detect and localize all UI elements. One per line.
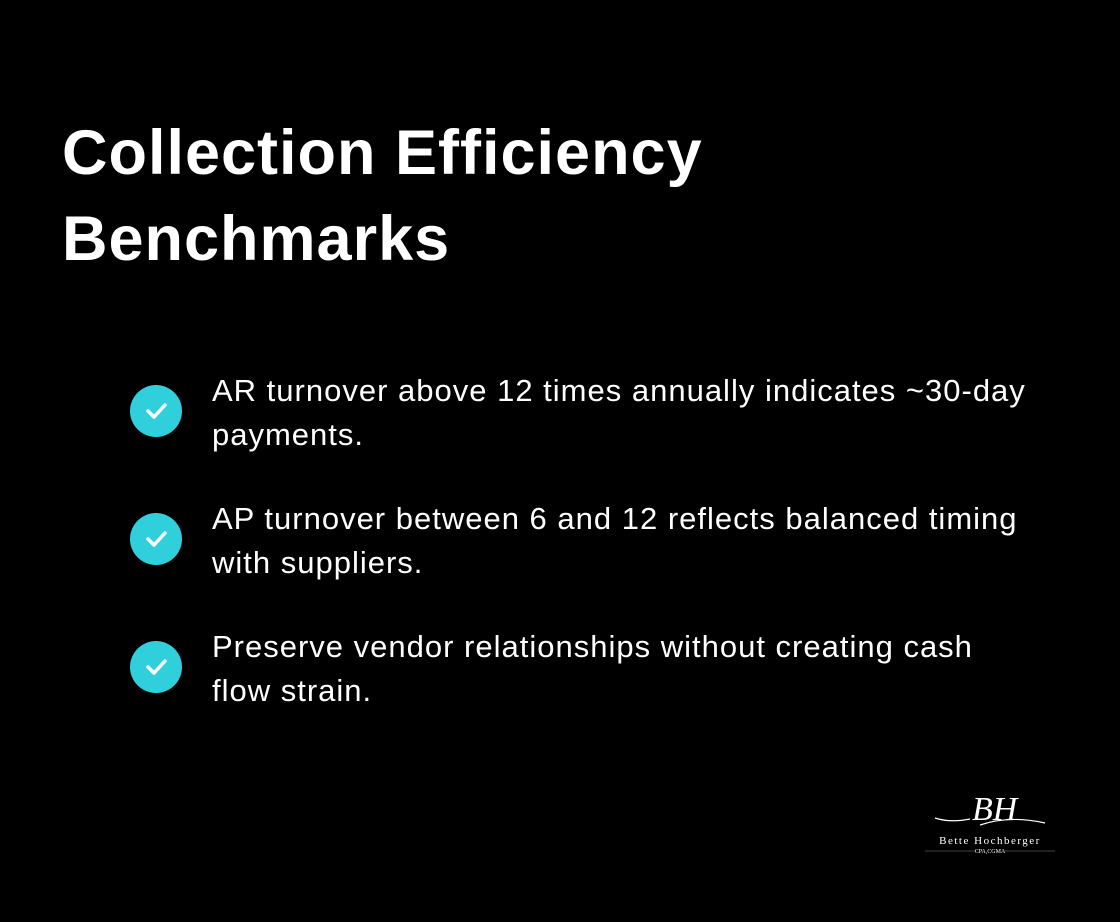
- text 2: [212, 501, 1018, 580]
- title: Collection Efficiency: [62, 118, 703, 188]
- icon: check: [130, 641, 182, 693]
- text 2: AP turnover between 6 and 12 reflects balanced timing: [212, 501, 1018, 536]
- logo: [925, 791, 1055, 855]
- text 3: Preserve vendor relationships without creating cash: [212, 629, 973, 664]
- text 3: [212, 629, 973, 708]
- item 1: [130, 373, 1026, 452]
- icon: check: [130, 513, 182, 565]
- item 3: [130, 629, 973, 708]
- title: [62, 118, 703, 274]
- logo: Bette Hochberger: [939, 835, 1041, 847]
- logo: CPA,CGMA: [975, 849, 1006, 855]
- text 1: payments.: [212, 417, 364, 452]
- logo: BH: [972, 791, 1020, 828]
- item 2: [130, 501, 1018, 580]
- text 2: with suppliers.: [212, 545, 423, 580]
- text 1: [212, 373, 1026, 452]
- text 3: flow strain.: [212, 673, 372, 708]
- icon: check: [130, 385, 182, 437]
- title: Benchmarks: [62, 204, 450, 274]
- text 1: AR turnover above 12 times annually indicates ~30-day: [212, 373, 1026, 408]
